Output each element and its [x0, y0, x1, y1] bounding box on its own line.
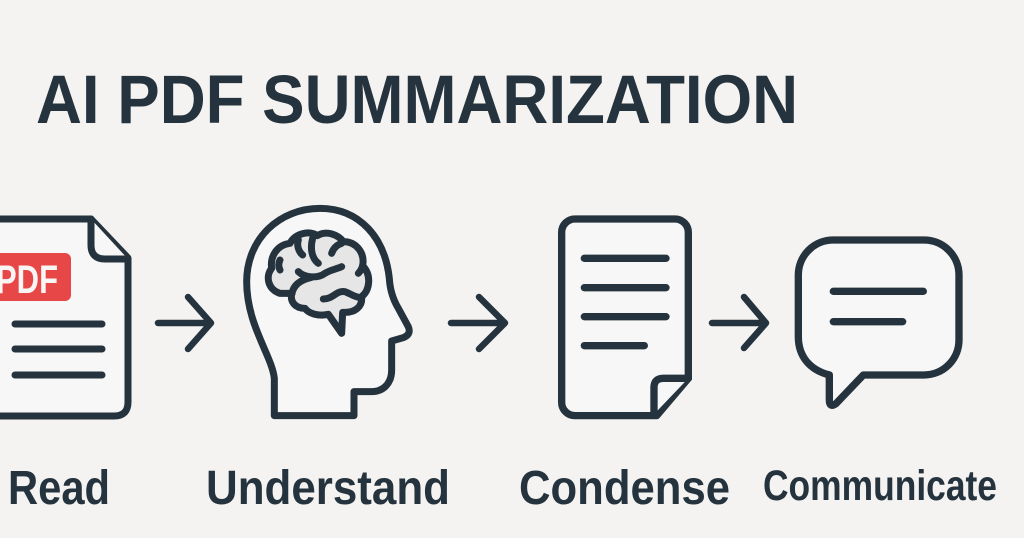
label: Understand: Understand [206, 462, 450, 515]
label: Read: Read [8, 462, 110, 515]
arrow: read to understand [158, 297, 211, 349]
icon: condensed document [562, 219, 688, 416]
title: AI PDF SUMMARIZATION [36, 61, 798, 138]
brain [268, 233, 369, 333]
icon: PDF document [0, 219, 128, 416]
icon: speech bubble [798, 240, 959, 405]
arrow: condense to communicate [712, 297, 766, 348]
arrow: understand to condense [451, 297, 505, 349]
icon: head with brain [247, 208, 409, 416]
label: Condense: Condense [519, 462, 730, 515]
